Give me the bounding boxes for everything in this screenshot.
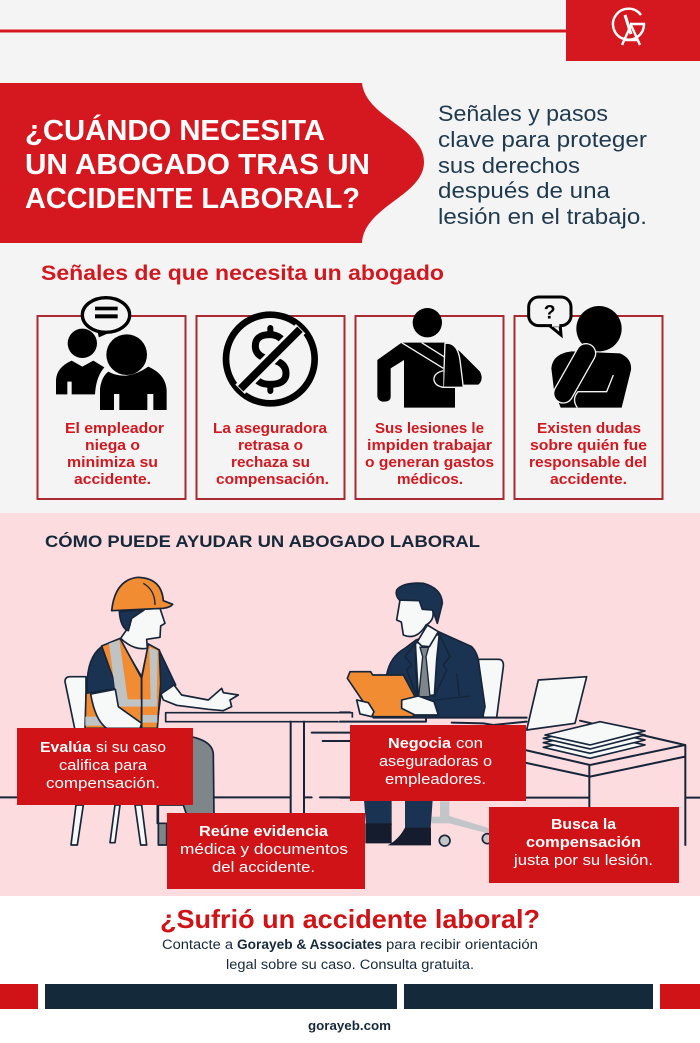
callout: Evalúa — [17, 728, 193, 805]
neck — [417, 625, 438, 647]
panel: call to action — [0, 896, 700, 1043]
forearm — [161, 685, 238, 711]
hair — [119, 610, 144, 631]
side table — [525, 721, 685, 845]
card 4 text: Existen dudas — [537, 421, 641, 437]
icon: thinking person with question bubble — [529, 297, 631, 408]
panel: card 4 — [514, 297, 662, 499]
hero title: ACCIDENTE LABORAL? — [25, 183, 360, 215]
CTA heading: ¿Sufrió un accidente laboral? — [160, 904, 540, 934]
callout: Evalúa: Evalúa — [40, 739, 92, 756]
vest — [85, 638, 161, 728]
callout: Negocia: aseguradoras o — [379, 753, 492, 770]
subtitle — [438, 101, 648, 229]
desk top continuation — [338, 718, 426, 722]
card 3 text: impiden trabajar — [367, 438, 492, 454]
callout: Busca: justa por su lesión. — [513, 852, 653, 869]
illustration: worker and desk — [0, 577, 352, 845]
folder — [347, 672, 415, 717]
callout: Evalúa: califica para — [59, 757, 148, 774]
callout: Reúne: Reúne evidencia — [199, 823, 329, 840]
callout: Reúne — [167, 813, 365, 889]
callout: Reúne: médica y documentos — [180, 841, 348, 858]
CTA text — [162, 937, 538, 972]
CTA text: Gorayeb & Associates — [237, 937, 382, 952]
icon: GA logo — [613, 9, 644, 45]
card 1 text: accidente. — [74, 472, 151, 488]
panel: card 3 — [356, 308, 504, 499]
hands — [357, 696, 438, 717]
card 1 text: minimiza su — [67, 455, 158, 471]
callout: Evalúa: compensación. — [46, 775, 160, 792]
hero title: ¿CUÁNDO NECESITA — [25, 115, 325, 147]
card 2 text — [213, 421, 329, 488]
callout: Busca — [489, 807, 679, 883]
desk top — [166, 713, 352, 722]
card 2 text: rechaza su — [231, 455, 310, 471]
card 2 text: compensación. — [216, 472, 329, 488]
shirt — [87, 645, 176, 727]
chair — [65, 677, 147, 845]
hair — [396, 583, 442, 623]
section heading: lawyer help: CÓMO PUEDE AYUDAR UN ABOGADO LABORAL — [45, 532, 480, 551]
subtitle: lesión en el trabajo. — [438, 204, 647, 229]
card 4 text: responsable del — [529, 455, 647, 471]
subtitle: sus derechos — [438, 153, 580, 178]
desk edge — [340, 712, 527, 722]
footer bars — [0, 984, 700, 1009]
hero title — [25, 115, 370, 215]
legs — [157, 735, 214, 845]
illustration: lawyer and side table — [338, 583, 700, 846]
website: gorayeb.com — [308, 1019, 391, 1033]
hero title: UN ABOGADO TRAS UN — [25, 149, 370, 181]
upper arm — [91, 689, 142, 728]
subtitle: Señales y pasos — [438, 101, 608, 126]
CTA text: para recibir orientación — [386, 937, 538, 952]
icon: person with arm sling — [377, 308, 482, 408]
card 4 text: sobre quién fue — [530, 438, 647, 454]
hero banner — [0, 83, 424, 243]
callout: Negocia: con — [456, 735, 483, 752]
subtitle: después de una — [438, 178, 611, 203]
face — [397, 600, 433, 637]
laptop — [527, 677, 587, 730]
section heading: signs: Señales de que necesita un abogado — [41, 261, 444, 285]
card 2 text: La aseguradora — [213, 421, 328, 437]
icon: thinking person with question bubble: ? — [544, 302, 556, 323]
callout: Negocia — [350, 725, 526, 801]
panel: card 1 — [38, 298, 186, 499]
card 4 text — [529, 421, 647, 488]
card 1 text: niega o — [85, 438, 140, 454]
trousers and shoes — [364, 800, 433, 845]
desk legs — [291, 722, 350, 815]
icon: crossed-out dollar — [226, 315, 315, 403]
card 4 text: accidente. — [550, 472, 627, 488]
icon: two people with speech bubble — [56, 298, 167, 410]
card 1 text — [65, 421, 164, 488]
card 3 text: o generan gastos — [365, 455, 494, 471]
card 3 text: médicos. — [397, 472, 463, 488]
CTA text: legal sobre su caso. Consulta gratuita. — [226, 957, 474, 972]
papers — [543, 722, 645, 758]
jacket — [373, 632, 485, 717]
header rule — [0, 30, 566, 32]
callout: Reúne: del accidente. — [212, 859, 315, 876]
subtitle: clave para proteger — [438, 127, 648, 152]
callout: Busca: Busca la — [551, 816, 617, 833]
CTA text: Contacte a — [162, 937, 234, 952]
card 1 text: El empleador — [65, 421, 164, 437]
callout: Negocia: empleadores. — [385, 771, 486, 788]
card 3 text: Sus lesiones le — [375, 421, 484, 437]
shirt and tie — [405, 634, 471, 700]
panel: how a lawyer helps — [0, 513, 700, 896]
helmet — [112, 577, 173, 611]
card 3 text — [365, 421, 494, 488]
panel: card 2 — [196, 315, 344, 499]
card 2 text: retrasa o — [238, 438, 303, 454]
callout: Negocia: Negocia — [388, 735, 452, 752]
office chair — [432, 659, 503, 846]
neck and face — [121, 608, 165, 649]
callout: Evalúa: si su caso — [96, 739, 166, 756]
callout: Busca: compensación — [526, 834, 641, 851]
logo block — [566, 0, 700, 61]
